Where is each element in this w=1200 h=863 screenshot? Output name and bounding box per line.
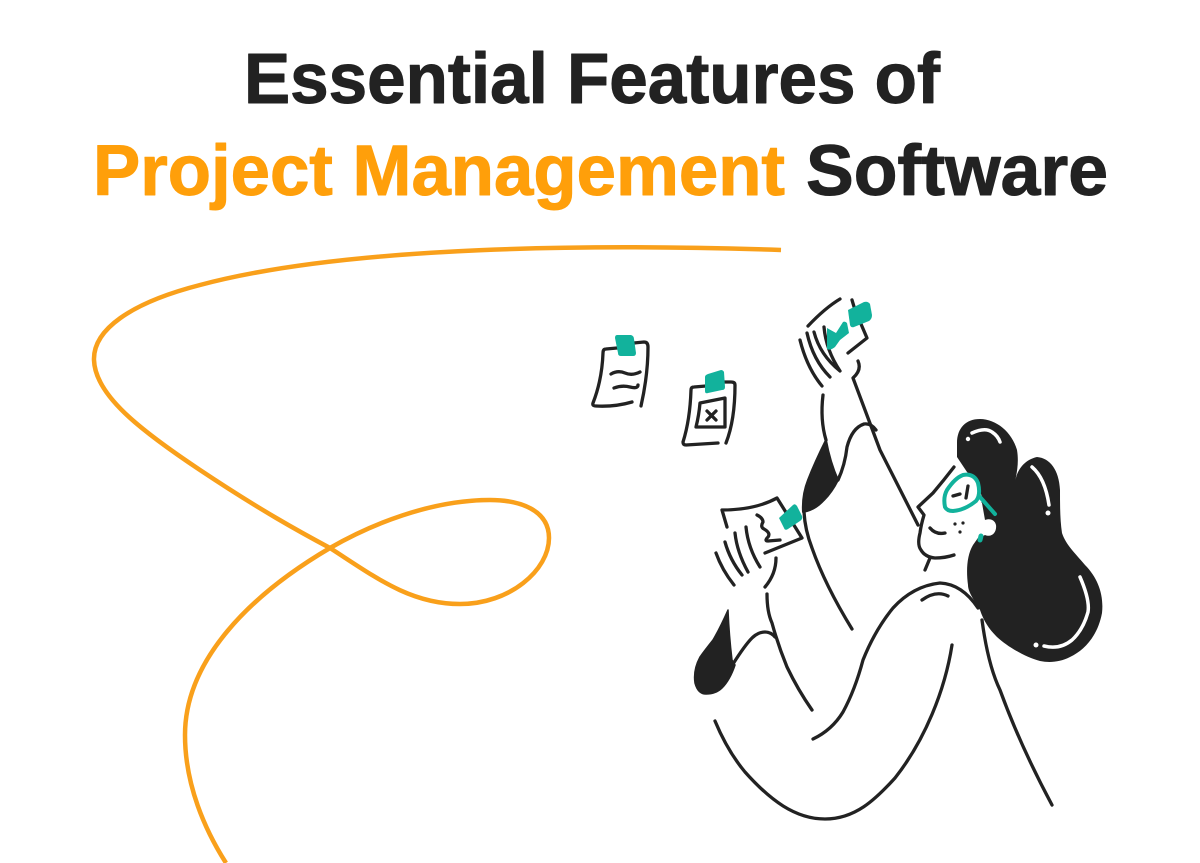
title: Software bbox=[806, 132, 1108, 211]
icon: upper raised hand with papers bbox=[800, 299, 918, 525]
figure: lower arm and elbow bbox=[695, 594, 812, 710]
icon: lower hand with paper bbox=[716, 498, 802, 587]
icon: sticky note with wavy lines bbox=[593, 335, 648, 406]
orange looping line bbox=[94, 247, 781, 863]
figure: hair bbox=[957, 419, 1102, 662]
title: Project Management bbox=[93, 132, 785, 211]
title bbox=[93, 40, 1108, 211]
figure: body and legs bbox=[715, 583, 1052, 819]
icon: teal glasses bbox=[944, 475, 995, 540]
title: Essential Features of bbox=[244, 40, 940, 119]
figure: upper arm and sleeve bbox=[803, 395, 876, 629]
icon: sticky note with x bbox=[683, 370, 735, 445]
figure: face bbox=[918, 467, 996, 570]
